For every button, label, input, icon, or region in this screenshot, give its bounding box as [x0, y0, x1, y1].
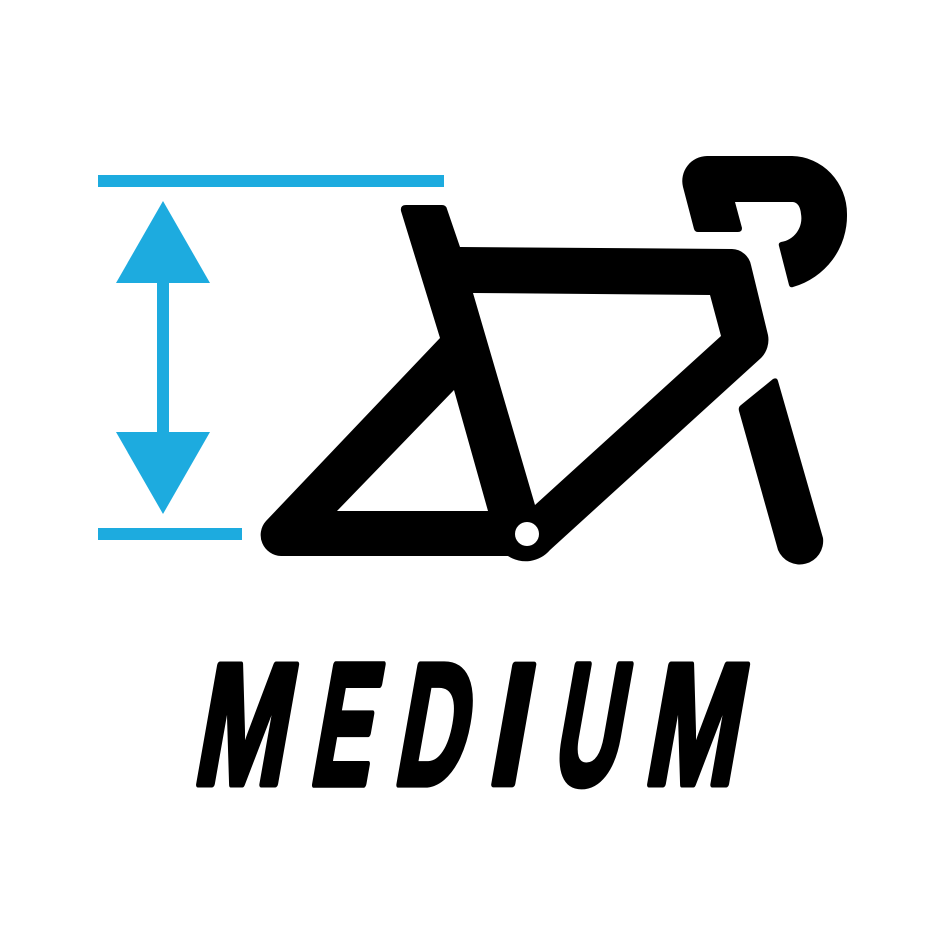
- frame: [261, 205, 768, 561]
- handlebar: [682, 156, 847, 287]
- bottom measurement line: [98, 528, 242, 540]
- bottom bracket: [515, 522, 539, 546]
- top measurement line: [98, 175, 444, 187]
- double-headed arrow: [116, 201, 210, 514]
- label: MEDIUM: M: [635, 628, 762, 822]
- measurement indicator: [98, 175, 444, 540]
- icon: bicycle frame: [261, 156, 847, 564]
- label: MEDIUM: [184, 627, 762, 822]
- label: MEDIUM: E: [301, 628, 396, 821]
- label: MEDIUM: I: [479, 628, 549, 821]
- label: MEDIUM: M: [184, 628, 311, 822]
- label: MEDIUM: D: [385, 629, 489, 822]
- label: MEDIUM: U: [543, 627, 644, 821]
- fork: [739, 378, 823, 564]
